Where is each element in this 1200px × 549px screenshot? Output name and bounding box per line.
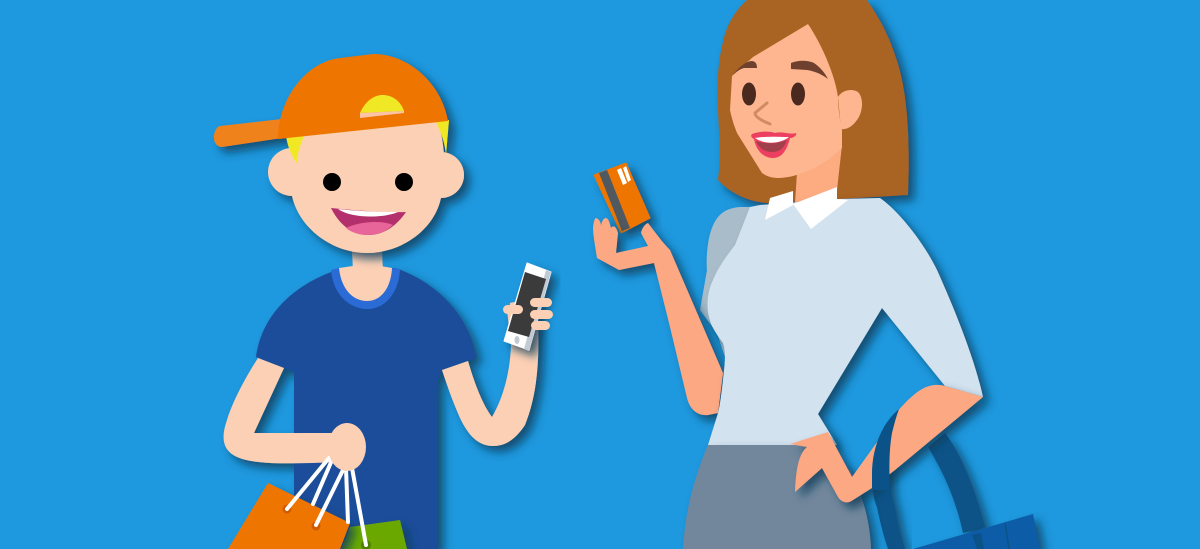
teeth — [755, 137, 789, 143]
woman ear — [838, 90, 862, 129]
skirt — [683, 445, 871, 549]
boy head group — [214, 54, 464, 253]
card — [594, 163, 650, 233]
left ear — [268, 148, 316, 196]
boy right arm — [442, 300, 538, 446]
woman mouth — [751, 132, 796, 158]
bag body — [913, 514, 1040, 549]
woman raised arm and hand — [593, 218, 723, 415]
blouse — [708, 198, 983, 445]
phone home button — [514, 336, 520, 344]
woman hip arm — [790, 385, 983, 502]
face — [291, 120, 444, 253]
mouth interior — [331, 208, 406, 235]
collar inner neck — [339, 266, 392, 301]
boy figure — [214, 54, 553, 549]
nose — [755, 103, 770, 124]
boy fingers — [503, 298, 553, 330]
boy torso and arms — [224, 268, 538, 549]
bag handles — [287, 458, 366, 545]
shirt — [256, 268, 476, 549]
right hair — [436, 120, 449, 155]
right ear — [418, 152, 464, 198]
boy neck — [352, 250, 383, 272]
bag front strap lower — [872, 433, 905, 549]
card stripe — [599, 170, 630, 231]
phone body — [504, 263, 551, 350]
boy left arm — [224, 358, 340, 463]
left collar — [765, 191, 793, 220]
cap hole skin — [360, 111, 404, 118]
orange bag handle holes — [282, 504, 320, 530]
green bag — [341, 520, 407, 549]
face — [730, 24, 842, 178]
green bag handle hole — [361, 540, 371, 549]
neck — [795, 145, 842, 204]
orange shopping bag and handles — [228, 458, 407, 549]
tongue — [346, 222, 393, 235]
bag front strap crescent over arm — [872, 409, 899, 490]
shirt collar — [331, 268, 400, 309]
left eye — [742, 82, 756, 106]
cap hole hair — [360, 95, 404, 113]
cap brim — [214, 119, 282, 147]
right eyebrow — [791, 61, 828, 79]
hair — [718, 0, 909, 203]
left eyebrow — [733, 61, 757, 75]
woman figure — [593, 0, 1040, 549]
right eye — [791, 82, 805, 106]
mouth interior — [756, 140, 787, 152]
boy fist — [328, 423, 366, 471]
bag strap on body — [972, 533, 984, 549]
boy mouth — [331, 208, 406, 235]
left hair — [286, 136, 304, 163]
tote bag — [913, 514, 1040, 549]
lips — [751, 132, 796, 158]
card signature bars — [617, 166, 631, 185]
bag back strap — [928, 433, 985, 533]
cap dome — [278, 54, 448, 139]
bag seam — [1005, 523, 1009, 549]
right collar — [793, 187, 848, 229]
phone side — [524, 270, 551, 351]
boy right eye — [395, 173, 413, 191]
phone screen — [508, 272, 546, 337]
boy phone hand back — [510, 298, 540, 340]
boy left eye — [323, 173, 341, 191]
blouse shadow panel — [700, 207, 750, 377]
orange bag — [228, 483, 350, 549]
teeth — [338, 209, 398, 217]
phone — [504, 263, 551, 351]
